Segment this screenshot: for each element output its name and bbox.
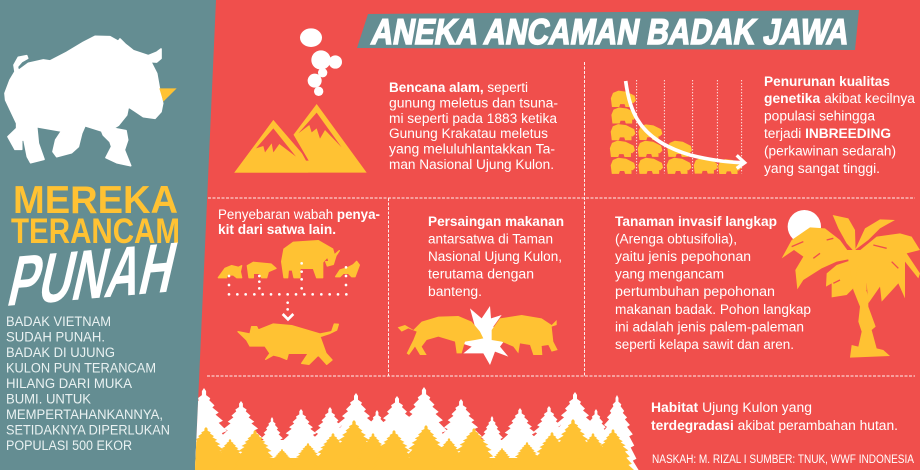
text: genetic quality: (perkawinan sedarah)	[764, 144, 896, 158]
background: red main panel	[195, 0, 920, 470]
icon: fighting bulls	[398, 306, 558, 365]
text: genetic quality: populasi sehingga	[764, 108, 875, 124]
text: langkap: (Arenga obtusifolia),	[615, 232, 737, 246]
text: genetic quality: yang sangat tinggi.	[764, 161, 880, 176]
text: langkap: ini adalah jenis palem-paleman	[615, 320, 804, 334]
text: food competition	[428, 214, 564, 299]
text: genetic quality: Penurunan kualitas	[764, 74, 890, 89]
panel: food competition	[398, 214, 564, 365]
text: bencana alam: Bencana alam, seperti	[389, 80, 528, 95]
text: langkap: seperti kelapa sawit dan aren.	[615, 337, 794, 352]
text: langkap: yang mengancam	[615, 266, 724, 282]
text: langkap	[615, 214, 811, 352]
text: food competition: terutama dengan	[428, 266, 534, 282]
text: bencana alam: mi seperti pada 1883 ketika	[389, 111, 557, 126]
text block: sidebar description: BADAK DI UJUNG	[6, 345, 115, 360]
text: disease spread	[218, 207, 380, 237]
text: food competition: Persaingan makanan	[428, 214, 564, 229]
text: bencana alam: gunung meletus dan tsuna-	[389, 96, 558, 110]
panel: disease	[218, 207, 380, 364]
chart: declining rhino population	[611, 80, 745, 173]
text block: sidebar description	[6, 314, 170, 453]
heading: mereka terancam punah: MEREKA	[13, 179, 178, 222]
text: langkap: pertumbuhan pepohonan	[615, 284, 775, 299]
heading: mereka terancam punah: TERANCAM	[11, 212, 180, 251]
panel: invasive plant	[615, 210, 920, 358]
text: food competition: banteng.	[428, 284, 482, 299]
text: bencana alam: man Nasional Ujung Kulon.	[389, 157, 554, 172]
text block: sidebar description: HILANG DARI MUKA	[6, 376, 132, 391]
text block: sidebar description: MEMPERTAHANKANNYA,	[6, 407, 163, 422]
panel: natural disaster	[234, 28, 558, 173]
text: disease spread: kit dari satwa lain.	[218, 222, 336, 237]
text: langkap: makanan badak. Pohon langkap	[615, 302, 811, 317]
text: food competition: antarsatwa di Taman	[428, 232, 553, 246]
text: habitat	[651, 400, 898, 433]
icon: palm tree and sun	[782, 210, 920, 358]
icon: white rhino with yellow horn	[5, 36, 177, 166]
icon: animals spreading disease to rhino	[218, 241, 359, 364]
text: bencana alam: yang meluluhlantakkan Ta-	[389, 142, 555, 156]
panel: left sidebar	[1, 36, 184, 453]
text block: sidebar description: BADAK VIETNAM	[6, 314, 111, 329]
text: habitat: Habitat Ujung Kulon yang	[651, 400, 812, 415]
text: habitat: terdegradasi akibat perambahan hutan.	[651, 418, 898, 433]
text: genetic quality	[764, 74, 915, 176]
panel: genetic quality	[611, 74, 915, 176]
panel: habitat and forest	[172, 387, 898, 470]
text: langkap: Tanaman invasif langkap	[615, 214, 777, 229]
text: food competition: Nasional Ujung Kulon,	[428, 249, 562, 264]
text: genetic quality: genetika akibat kecilnya	[764, 91, 915, 106]
text: bencana alam: Gunung Krakatau meletus	[389, 126, 548, 141]
text block: sidebar description: SUDAH PUNAH.	[6, 330, 105, 344]
text: langkap: yaitu jenis pepohonan	[615, 249, 751, 264]
text block: sidebar description: SETIDAKNYA DIPERLUKAN	[6, 422, 170, 438]
heading: mereka terancam punah: PUNAH	[1, 228, 184, 322]
text block: sidebar description: BUMI. UNTUK	[6, 392, 91, 406]
text: disease spread: Penyebaran wabah penya-	[218, 207, 380, 222]
text block: sidebar description: KULON PUN TERANCAM	[6, 360, 156, 376]
text block: sidebar description: POPULASI 500 EKOR	[6, 438, 132, 453]
illustration: forest	[172, 387, 639, 470]
icon: erupting volcano	[234, 28, 367, 173]
heading: mereka terancam punah	[1, 179, 184, 322]
text: genetic quality: terjadi INBREEDING	[764, 126, 891, 141]
text: bencana alam	[389, 80, 558, 172]
